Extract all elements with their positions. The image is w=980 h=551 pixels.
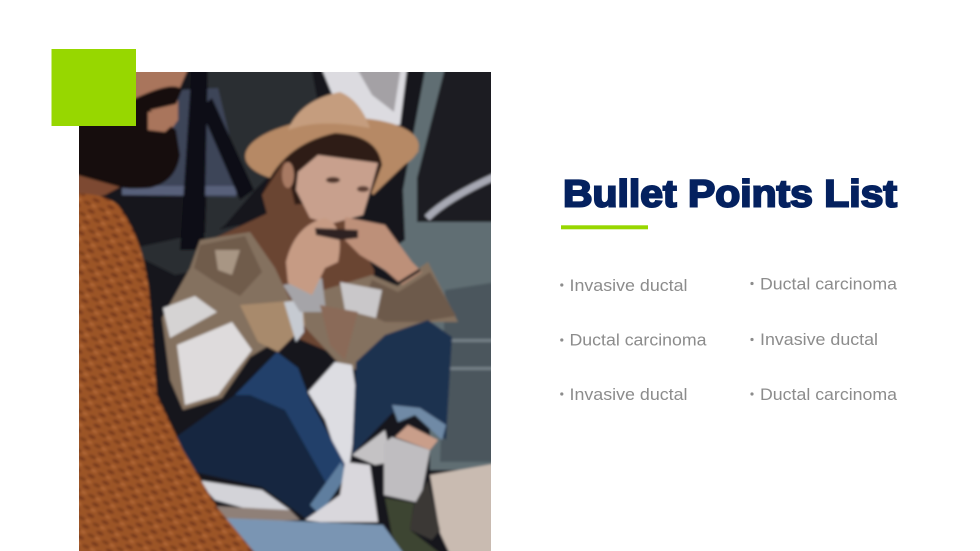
woman's face — [296, 155, 378, 224]
outside sky — [320, 72, 409, 128]
man's face — [136, 72, 190, 130]
left hand — [286, 218, 340, 295]
title: Bullet Points List — [563, 174, 897, 216]
light jeans — [223, 518, 412, 551]
right hand — [345, 217, 422, 285]
man's beard — [79, 85, 182, 190]
item: left row 1: Invasive ductal — [570, 276, 688, 295]
item: right row 3: Ductal carcinoma — [760, 385, 898, 404]
item: right row 1: Ductal carcinoma — [760, 274, 898, 294]
white fabric — [305, 462, 378, 522]
eyes — [326, 177, 340, 183]
bullet list: right column — [750, 274, 898, 404]
woman's left leg jeans — [176, 394, 325, 518]
hair under hat — [262, 133, 382, 205]
ground — [428, 462, 491, 551]
green square accent — [52, 49, 136, 126]
sock — [384, 437, 430, 503]
door panel — [440, 282, 491, 462]
boot — [384, 498, 439, 551]
item: right row 2: Invasive ductal — [760, 330, 878, 349]
car door window — [416, 72, 491, 223]
harmonica — [315, 228, 358, 240]
white inner shirt — [308, 362, 358, 470]
photo: couple sitting in car doorway — [79, 72, 491, 551]
title underline — [561, 225, 648, 229]
shirt white panels — [177, 322, 252, 405]
item: left row 2: Ductal carcinoma — [570, 330, 707, 350]
woman's long hair — [218, 202, 376, 352]
item: left row 3: Invasive ductal — [570, 385, 688, 404]
man's window — [156, 87, 240, 198]
left jeans cuff — [310, 462, 347, 515]
car door — [382, 72, 491, 472]
right jeans cuff — [392, 405, 446, 440]
hat crown — [288, 92, 370, 130]
hat brim — [243, 117, 420, 180]
woman's right leg jeans — [352, 320, 452, 455]
bracelet — [396, 270, 420, 285]
bullet list: left column — [560, 276, 707, 404]
steering wheel — [423, 172, 491, 222]
seat belt strap — [180, 60, 208, 250]
man's orange sweater — [79, 194, 256, 551]
plaid shirt — [162, 232, 458, 410]
car seat — [204, 72, 318, 232]
